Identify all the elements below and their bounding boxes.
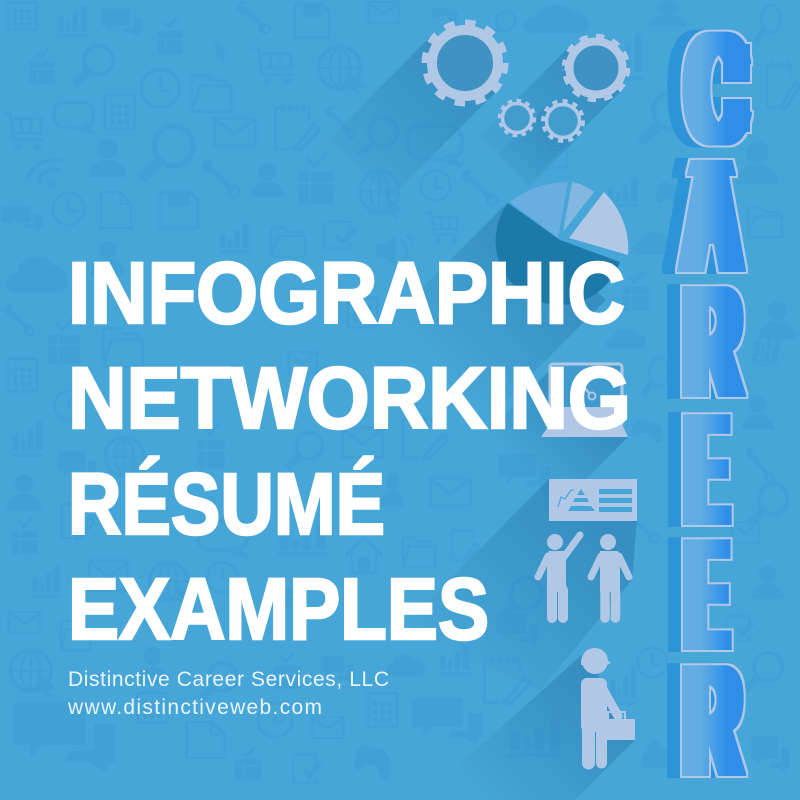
icon: two people: [538, 534, 629, 618]
vertical word: CAREER: [683, 0, 746, 800]
board text lines: [599, 489, 632, 512]
vertical word: CAREER: E: [687, 507, 726, 683]
vertical word: CAREER: E: [687, 382, 726, 558]
large gear left: [425, 23, 505, 103]
icon: laptop: [541, 364, 628, 437]
vertical word: CAREER: A: [683, 126, 740, 305]
small gear right: [543, 101, 583, 141]
company credit: [67, 668, 389, 719]
title: [68, 245, 631, 658]
icon: gears: [425, 23, 628, 141]
icon: worker with briefcase: [581, 648, 635, 763]
small gear left: [500, 100, 534, 136]
vertical word: CAREER: C: [687, 0, 746, 177]
title line 3: RÉSUMÉ: [68, 456, 385, 553]
long shadows behind icons: [329, 32, 637, 800]
company name: Distinctive Career Services, LLC: [68, 668, 389, 691]
website: www.distinctiveweb.com: [67, 696, 322, 719]
person pointing: [538, 534, 580, 618]
large gear right: [564, 36, 628, 100]
title line 1: INFOGRAPHIC: [68, 245, 625, 342]
vertical word: CAREER: R: [685, 255, 740, 430]
person standing: [591, 534, 629, 618]
title line 4: EXAMPLES: [68, 561, 489, 658]
board growth arrow: [558, 490, 574, 507]
icon: presentation board: [549, 479, 637, 521]
title line 2: NETWORKING: [68, 350, 631, 447]
icon: pie chart: [496, 182, 628, 305]
board pyramid: [568, 489, 595, 511]
